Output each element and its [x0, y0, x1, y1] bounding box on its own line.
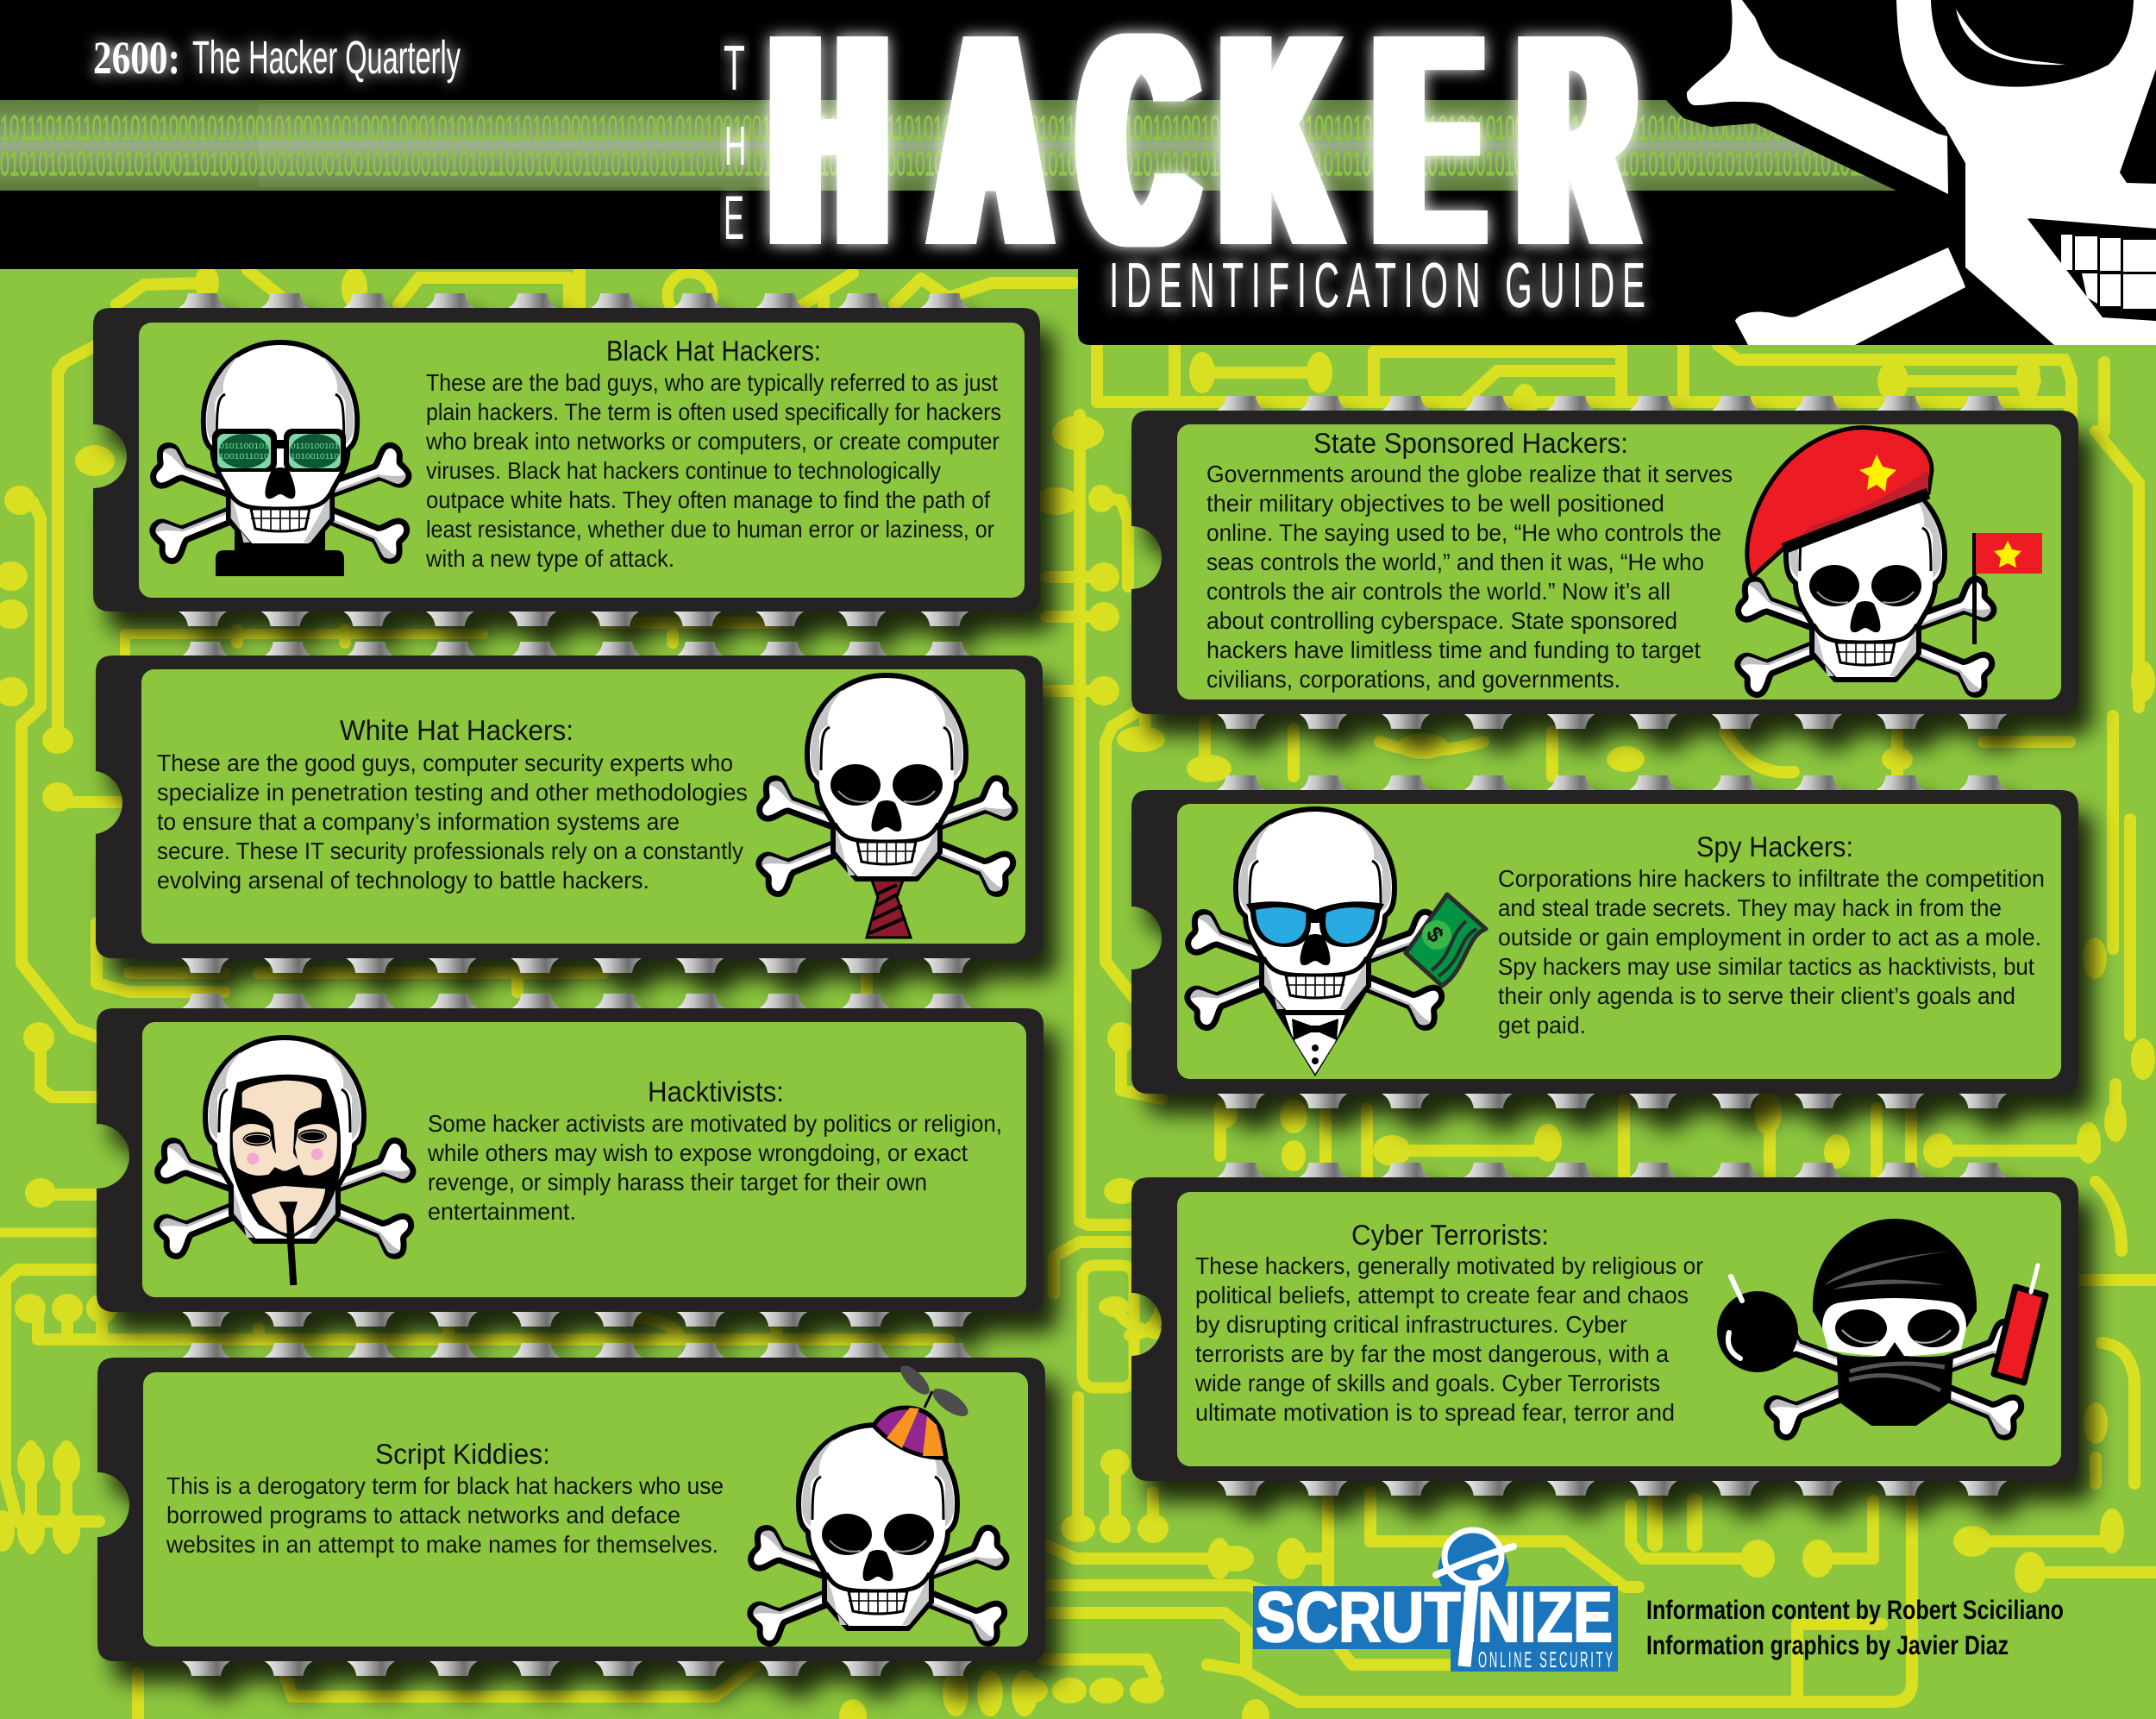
chip body and pins: [97, 1343, 1045, 1676]
icon: skull with sunglasses, tuxedo and money: [1184, 809, 1486, 1076]
icon: skull with sunglasses, tuxedo and money: $: [1421, 922, 1450, 947]
body text: controls the air controls the world.” Now it’s all: [1206, 578, 1670, 605]
logo: Scrutinize Online Security: [1253, 1530, 1618, 1672]
chip body and pins: [96, 642, 1043, 973]
mouth and teeth: [2028, 218, 2156, 321]
body text: Spy hackers may use similar tactics as hacktivists, but: [1498, 953, 2034, 980]
header panel: [0, 0, 2156, 345]
heading: Script Kiddies:: [375, 1438, 550, 1470]
body text: Some hacker activists are motivated by politics or religion,: [428, 1110, 1002, 1137]
body text: by disrupting critical infrastructures. Cyber: [1195, 1311, 1627, 1338]
body text: [425, 369, 1001, 572]
body text: and steal trade secrets. They may hack in from the: [1498, 894, 2002, 921]
body text: while others may wish to expose wrongdoing, or exact: [427, 1139, 968, 1166]
chip body and pins: [1131, 1163, 2078, 1496]
logo wordmark: SCRUTINIZE: [1256, 1578, 1613, 1657]
body text: [166, 1472, 724, 1558]
chip: White Hat Hackers: [96, 642, 1043, 973]
inner panel: [1177, 804, 2061, 1079]
lower-left bone: [1735, 248, 1965, 345]
right margin: [2081, 1274, 2156, 1286]
title word: THE: [724, 32, 746, 253]
heading: Hacktivists:: [648, 1076, 784, 1107]
heading: Black Hat Hackers:: [606, 335, 821, 367]
eye socket: [1931, 0, 2134, 87]
body text: secure. These IT security professionals rely on a constantly: [157, 838, 743, 864]
inner panel: [1177, 424, 2061, 700]
body text: viruses. Black hat hackers continue to technologically: [426, 457, 941, 484]
icon: skull with necktie: [755, 675, 1018, 938]
body text: who break into networks or computers, or create computer: [425, 428, 1000, 455]
body text: civilians, corporations, and governments.: [1206, 666, 1620, 693]
heading: Cyber Terrorists:: [1351, 1219, 1549, 1251]
inner panel: [142, 1022, 1026, 1297]
body text: specialize in penetration testing and other methodologies: [157, 779, 748, 806]
inner panel: [1177, 1192, 2061, 1466]
chip: State Sponsored Hackers: [1131, 396, 2078, 729]
big skull and crossbones: [1666, 0, 2156, 345]
black header background: [0, 0, 2156, 345]
chip body and pins: [1131, 775, 2078, 1108]
body text: These hackers, generally motivated by religious or: [1195, 1252, 1703, 1279]
logo background: [1253, 1536, 1618, 1672]
icon: Guy Fawkes mask skull: [154, 1038, 416, 1285]
chip body and pins: [97, 994, 1044, 1327]
gaps left column: [125, 634, 483, 664]
body text: get paid.: [1498, 1012, 1586, 1038]
body text: outside or gain employment in order to act as a mole.: [1498, 924, 2041, 950]
chip: Spy Hackers: [1131, 775, 2078, 1108]
body text: [427, 1110, 1002, 1225]
heading: White Hat Hackers:: [340, 714, 573, 746]
center strip: [1080, 415, 1134, 1225]
icon: skull with matrix glasses: 1010010110: [291, 452, 339, 461]
icon: skull with matrix glasses: 0101100101: [219, 442, 269, 450]
inner panel: [141, 669, 1025, 944]
cheek and jaw: [1965, 161, 2156, 345]
chip: Black Hat Hackers: [93, 293, 1040, 626]
body text: plain hackers. The term is often used specifically for hackers: [426, 398, 1001, 425]
chip body and pins: [93, 293, 1040, 626]
publication name: The Hacker Quarterly: [192, 32, 461, 84]
inner panel: [143, 1372, 1028, 1647]
logo tagline: ONLINE SECURITY: [1478, 1647, 1613, 1672]
body text: least resistance, whether due to human error or laziness, or: [426, 516, 994, 543]
body text: to ensure that a company’s information systems are: [157, 808, 680, 835]
body text: ultimate motivation is to spread fear, terror and: [1195, 1399, 1675, 1426]
credits: Information graphics by Javier Diaz: [1646, 1630, 2009, 1660]
binary code band: [0, 100, 1906, 191]
body text: These are the bad guys, who are typically referred to as just: [426, 369, 998, 396]
cranium: [1896, 0, 2156, 229]
icon: skull with matrix glasses: 0110100101: [291, 442, 339, 450]
body text: wide range of skills and goals. Cyber Terrorists: [1194, 1370, 1660, 1396]
body text: political beliefs, attempt to create fear and chaos: [1195, 1282, 1689, 1308]
icon: skull with red beret and flag: [1734, 428, 2042, 698]
chip: Cyber Terrorists: [1131, 1163, 2078, 1496]
body text: This is a derogatory term for black hat hackers who use: [166, 1472, 724, 1499]
body text: [1206, 461, 1733, 693]
icon: skull with propeller beanie: [747, 1361, 1009, 1647]
body text: [157, 750, 748, 894]
icon: skull with matrix glasses: 1001011010: [219, 452, 269, 461]
body text: hackers have limitless time and funding to target: [1206, 637, 1701, 663]
inner panel: [139, 323, 1025, 598]
body text: their only agenda is to serve their client’s goals and: [1498, 982, 2015, 1009]
body text: their military objectives to be well positioned: [1206, 490, 1664, 517]
chip body and pins: [1131, 396, 2078, 729]
magnifier with eye: [1436, 1530, 1514, 1666]
heading: State Sponsored Hackers:: [1313, 427, 1628, 459]
body text: evolving arsenal of technology to battle hackers.: [157, 867, 649, 894]
chip: Script Kiddies: [97, 1343, 1045, 1676]
left strip: [58, 345, 97, 737]
heading: Spy Hackers:: [1696, 831, 1853, 863]
body text: websites in an attempt to make names for themselves.: [166, 1531, 718, 1558]
subtitle: IDENTIFICATION GUIDE: [1109, 249, 1645, 321]
body text: revenge, or simply harass their target for their own: [428, 1169, 927, 1195]
body text: with a new type of attack.: [425, 545, 674, 572]
body text: seas controls the world,” and then it was, “He who: [1206, 549, 1704, 575]
icon: masked skull with bomb and dynamite: [1717, 1219, 2046, 1440]
publication name: 2600:: [93, 32, 180, 84]
upper-left bone: [1687, 0, 1948, 194]
right column gaps: [1214, 1108, 1226, 1156]
credits: Information content by Robert Sciciliano: [1646, 1595, 2064, 1625]
body text: outpace white hats. They often manage to find the path of: [426, 486, 990, 513]
body text: [1194, 1252, 1703, 1426]
title word: THE: E: [724, 184, 744, 253]
publication name: [93, 32, 461, 84]
body text: about controlling cyberspace. State sponsored: [1206, 607, 1677, 634]
nose: [2120, 69, 2156, 184]
body text: terrorists are by far the most dangerous, with a: [1195, 1340, 1670, 1367]
title word: THE: H: [724, 115, 746, 177]
body text: Governments around the globe realize that it serves: [1206, 461, 1733, 487]
title word: THE: T: [724, 32, 745, 104]
credits: [1646, 1595, 2064, 1660]
chip: Hacktivists: [97, 994, 1044, 1327]
body text: borrowed programs to attack networks and deface: [166, 1502, 680, 1528]
body text: online. The saying used to be, “He who controls the: [1206, 519, 1721, 546]
body text: entertainment.: [428, 1198, 576, 1225]
body text: [1498, 865, 2045, 1038]
body text: Corporations hire hackers to infiltrate the competition: [1498, 865, 2045, 892]
icon: skull with matrix glasses: [149, 342, 411, 576]
body text: These are the good guys, computer security experts who: [157, 750, 733, 776]
